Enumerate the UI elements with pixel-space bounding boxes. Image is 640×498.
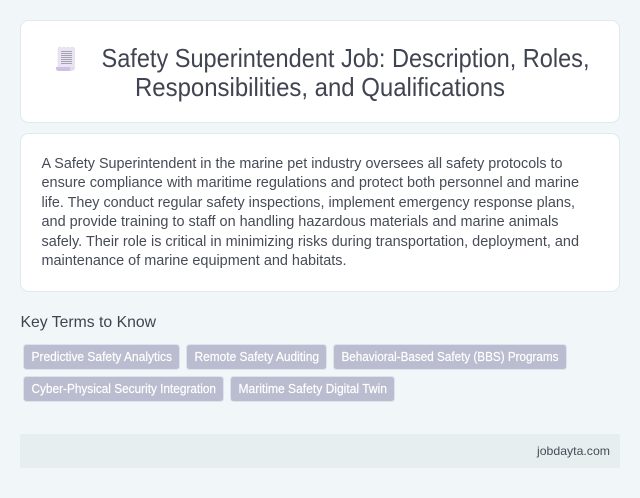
tag: Cyber-Physical Security Integration: Cyber-Physical Security Integration <box>32 382 216 396</box>
text block: description: ensure compliance with maritime regulations and protect both personnel and marine <box>42 175 579 191</box>
tag: Cyber-Physical Security Integration <box>24 376 224 402</box>
text block: description: life. They conduct regular safety inspections, implement emergency response plans, <box>42 195 575 211</box>
panel: title card <box>20 20 620 122</box>
heading: key terms: Key Terms to Know <box>20 314 156 331</box>
text block: description <box>42 156 579 269</box>
text block: description: safely. Their role is critical in minimizing risks during transportation, deployment, and <box>42 234 579 250</box>
footer bar <box>20 434 620 468</box>
text block: description: A Safety Superintendent in the marine pet industry oversees all safety protocols to <box>42 156 562 172</box>
title: Safety Superintendent Job: Description, Roles, <box>102 45 590 73</box>
tag: Predictive Safety Analytics: Predictive Safety Analytics <box>32 350 172 364</box>
title <box>102 45 590 102</box>
tag: Maritime Safety Digital Twin: Maritime Safety Digital Twin <box>238 382 387 396</box>
tag: Maritime Safety Digital Twin <box>230 376 394 402</box>
text block: description: maintenance of marine equipment and habitats. <box>42 253 346 269</box>
icon: document scroll <box>56 47 74 71</box>
tag: Behavioral-Based Safety (BBS) Programs: Behavioral-Based Safety (BBS) Programs <box>342 350 558 364</box>
tag: Remote Safety Auditing: Remote Safety Auditing <box>194 350 319 364</box>
tag: Predictive Safety Analytics <box>24 344 180 370</box>
panel: description card <box>20 134 620 292</box>
text block: description: and provide training to staff on handling hazardous materials and marine animals <box>42 214 558 230</box>
footer text: source: jobdayta.com <box>536 444 610 458</box>
tag: Remote Safety Auditing <box>186 344 326 370</box>
title: Responsibilities, and Qualifications <box>135 74 505 102</box>
tag list <box>24 344 566 402</box>
tag: Behavioral-Based Safety (BBS) Programs <box>334 344 566 370</box>
